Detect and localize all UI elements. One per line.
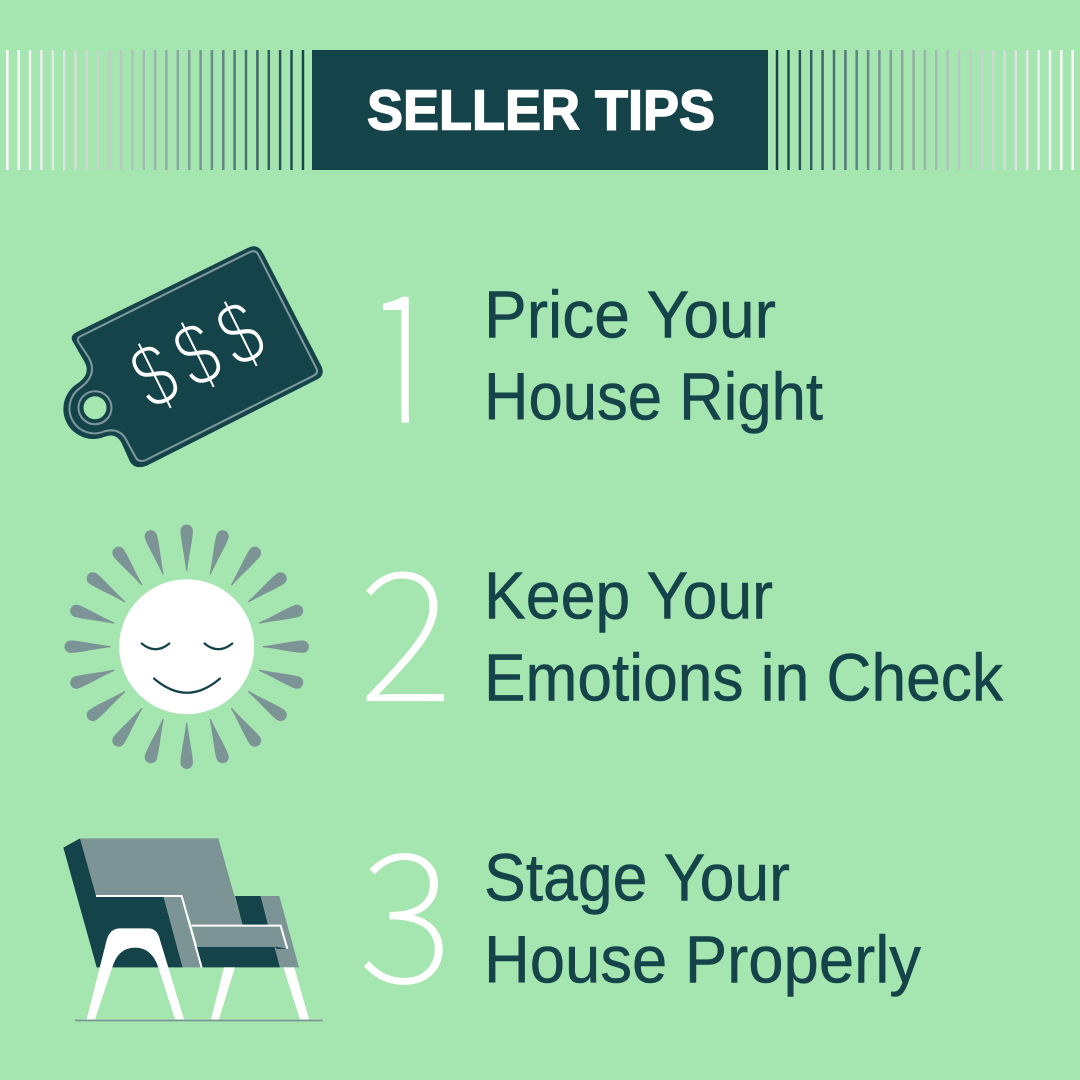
- dollar signs: [115, 280, 280, 430]
- number 1: 1: [356, 217, 448, 473]
- tip 1 text: Price Your: [484, 278, 776, 352]
- dollar signs: $: [115, 322, 194, 430]
- tip 3 text: [484, 840, 921, 998]
- tip 3 text: House Properly: [484, 922, 921, 998]
- tip 2 text: Keep Your: [484, 558, 773, 634]
- dollar signs: $: [158, 301, 237, 409]
- icon: armchair: [63, 838, 323, 1021]
- sun rays: [64, 524, 309, 769]
- number 3: 3: [359, 774, 452, 1034]
- tip 1 text: House Right: [484, 360, 823, 434]
- header band: [7, 50, 1073, 170]
- title: SELLER TIPS: [367, 78, 715, 142]
- icon: smiling sun: [64, 524, 309, 769]
- tip 2 text: Emotions in Check: [484, 640, 1003, 716]
- tip 3 text: Stage Your: [484, 840, 790, 916]
- number 2: 2: [359, 492, 452, 752]
- dollar signs: $: [201, 280, 280, 388]
- tip 1 text: [484, 278, 823, 434]
- icon: price tag: [63, 246, 323, 467]
- tip 2 text: [484, 558, 1003, 716]
